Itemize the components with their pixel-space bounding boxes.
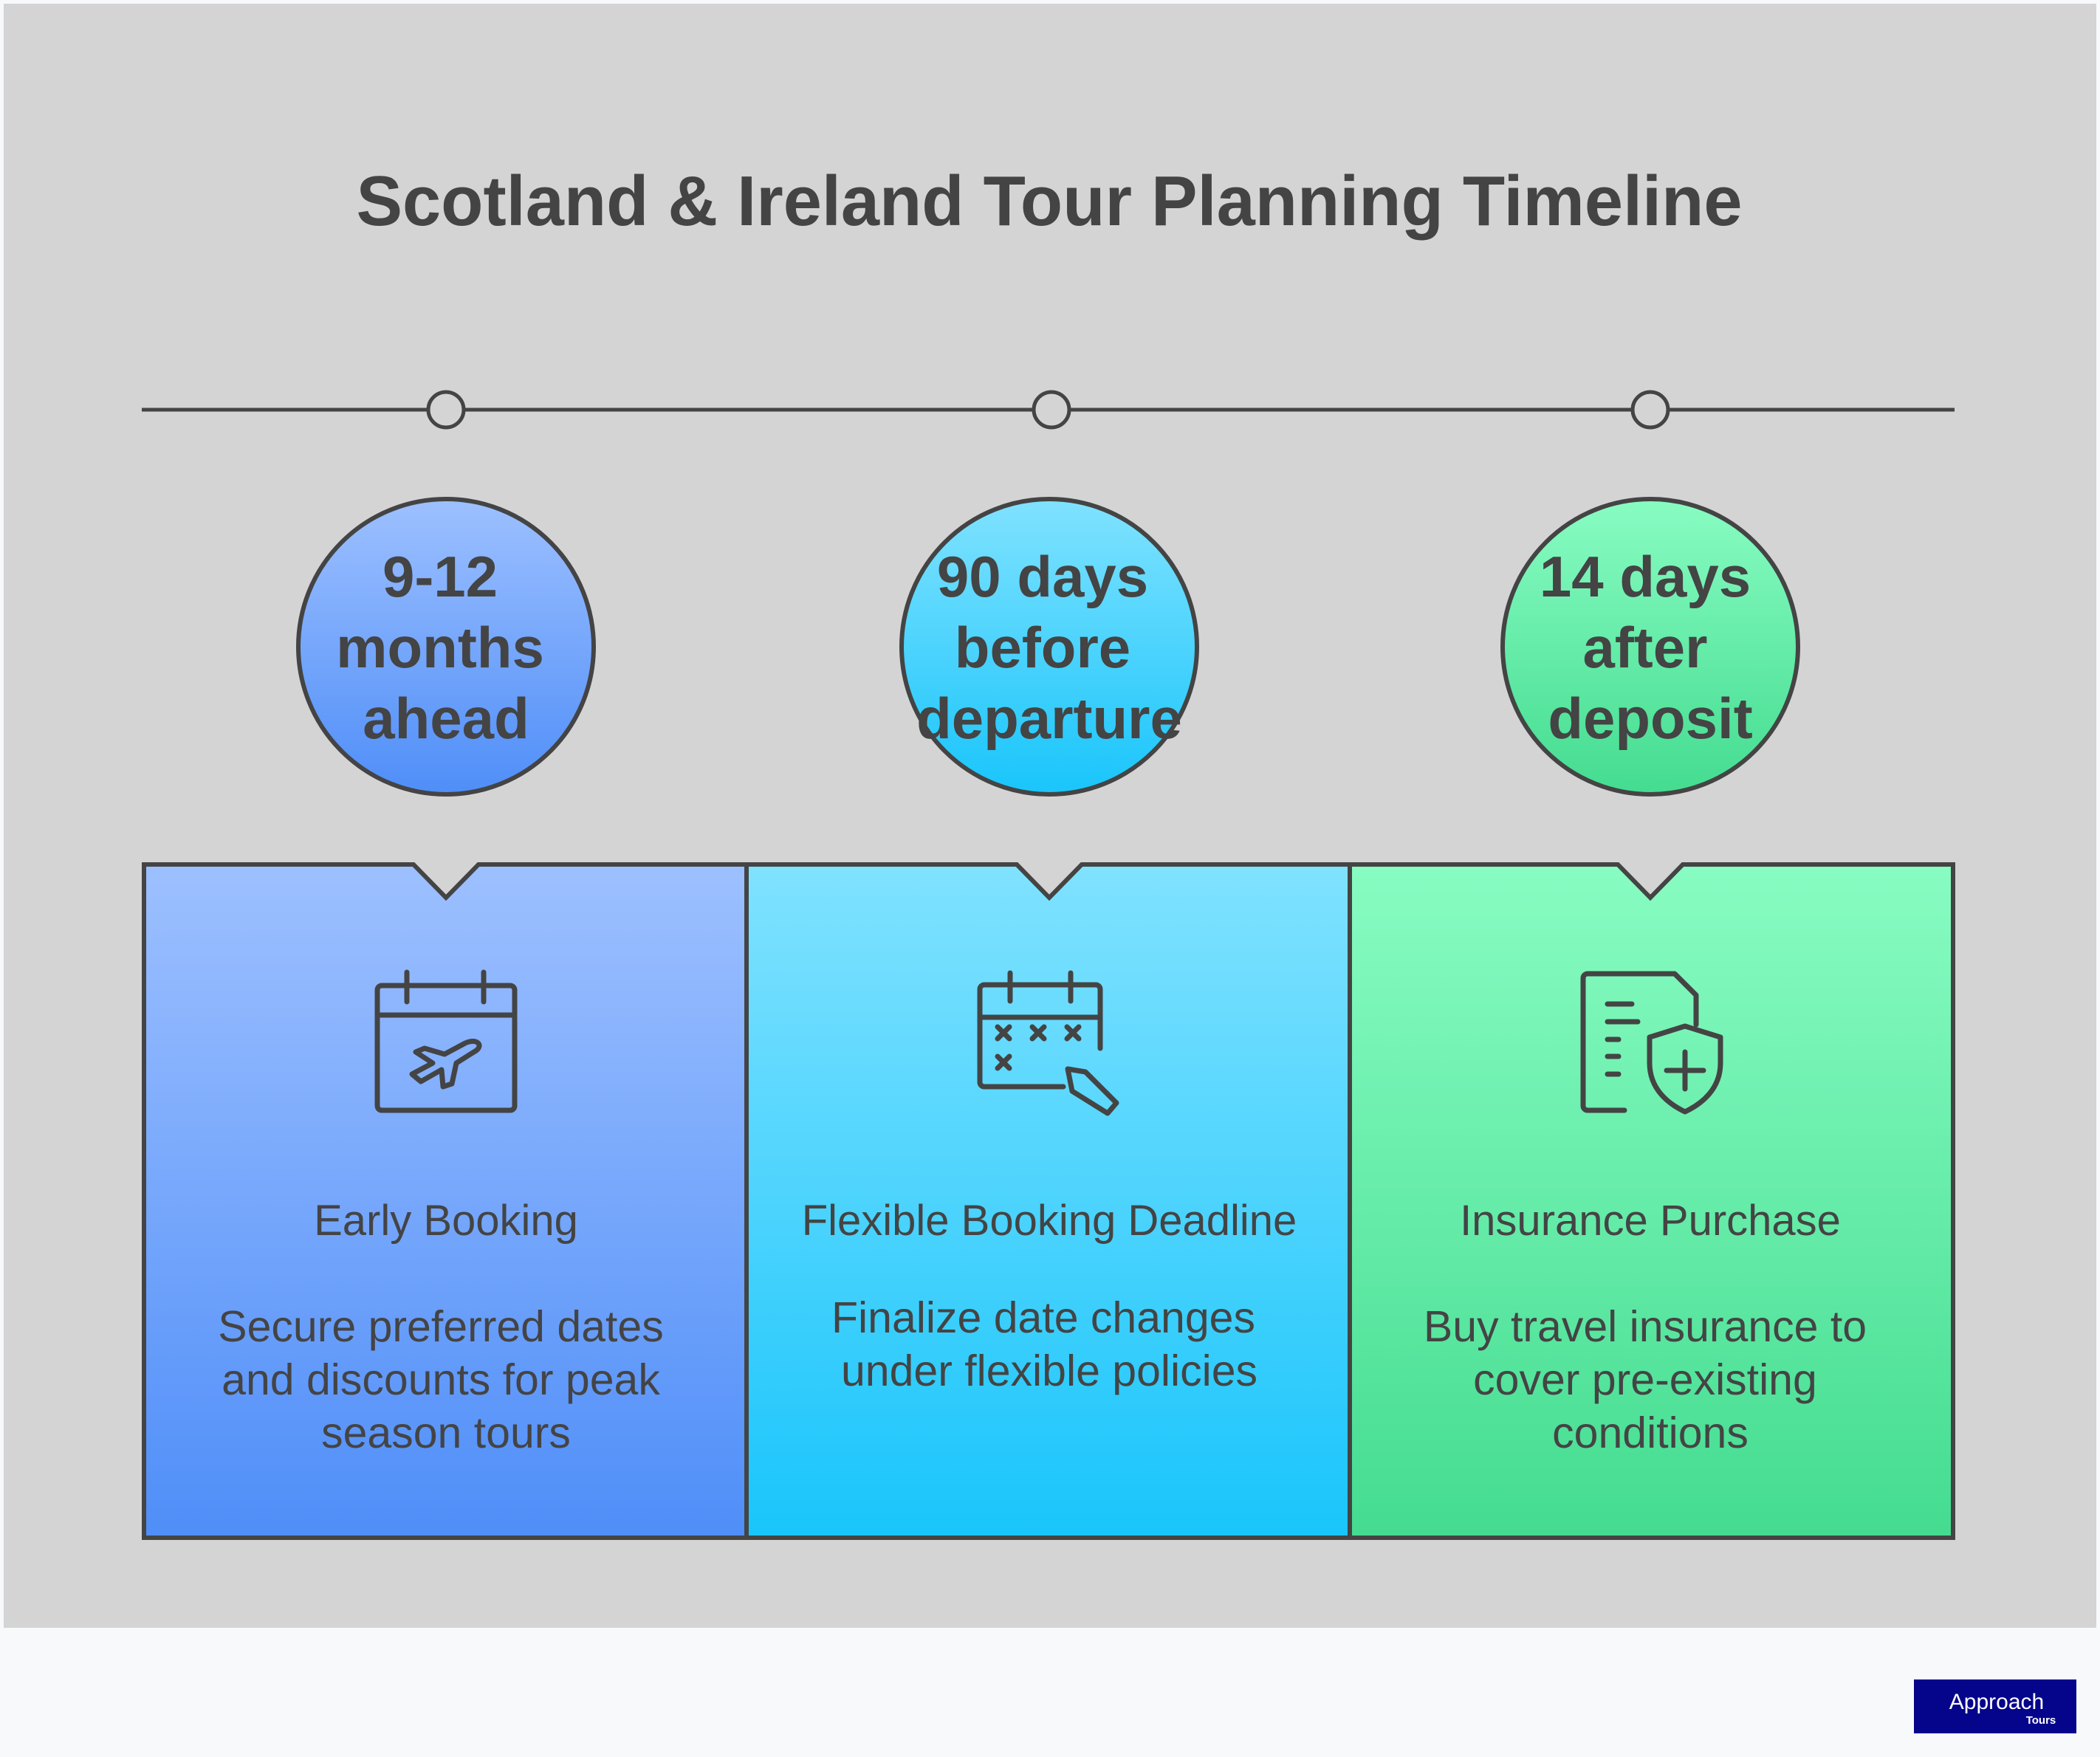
- milestone circle 3: [1503, 499, 1798, 794]
- description: Buy travel insurance to: [1424, 1302, 1867, 1351]
- panel: flexible booking deadline: [747, 864, 1350, 1538]
- icon: calendar with plane: [377, 972, 515, 1110]
- milestone circle 2: before: [955, 615, 1130, 680]
- milestone circle 3: deposit: [1548, 686, 1753, 751]
- logo: Approach: [1949, 1690, 2044, 1714]
- description: Secure preferred dates: [218, 1302, 664, 1351]
- heading: Early Booking: [314, 1197, 578, 1245]
- logo: [1914, 1679, 2076, 1733]
- milestone circle 1: [298, 499, 594, 794]
- heading: Insurance Purchase: [1460, 1197, 1841, 1245]
- title: Scotland & Ireland Tour Planning Timeline: [356, 162, 1743, 241]
- milestone circle 1: ahead: [363, 686, 529, 751]
- milestone circle 3: 14 days: [1540, 544, 1751, 609]
- timeline line: [142, 392, 1955, 427]
- description: Finalize date changes: [831, 1293, 1255, 1342]
- milestone circle 2: 90 days: [937, 544, 1148, 609]
- icon: calendar with pen: [980, 973, 1116, 1113]
- milestone circle 3: after: [1582, 615, 1708, 680]
- description: under flexible policies: [841, 1347, 1257, 1395]
- description: cover pre-existing: [1473, 1355, 1817, 1404]
- description: season tours: [321, 1409, 571, 1457]
- panel: insurance purchase: [1350, 864, 1953, 1538]
- icon: document with shield: [1583, 974, 1720, 1112]
- panel: early booking: [144, 864, 747, 1538]
- milestone circle 1: months: [336, 615, 544, 680]
- heading: Flexible Booking Deadline: [802, 1197, 1297, 1245]
- logo: Tours: [2026, 1714, 2056, 1727]
- description: and discounts for peak: [222, 1355, 660, 1404]
- milestone circle 2: [902, 499, 1197, 794]
- description: conditions: [1552, 1409, 1749, 1457]
- milestone circle 1: 9-12: [382, 544, 498, 609]
- milestone circle 2: departure: [916, 686, 1182, 751]
